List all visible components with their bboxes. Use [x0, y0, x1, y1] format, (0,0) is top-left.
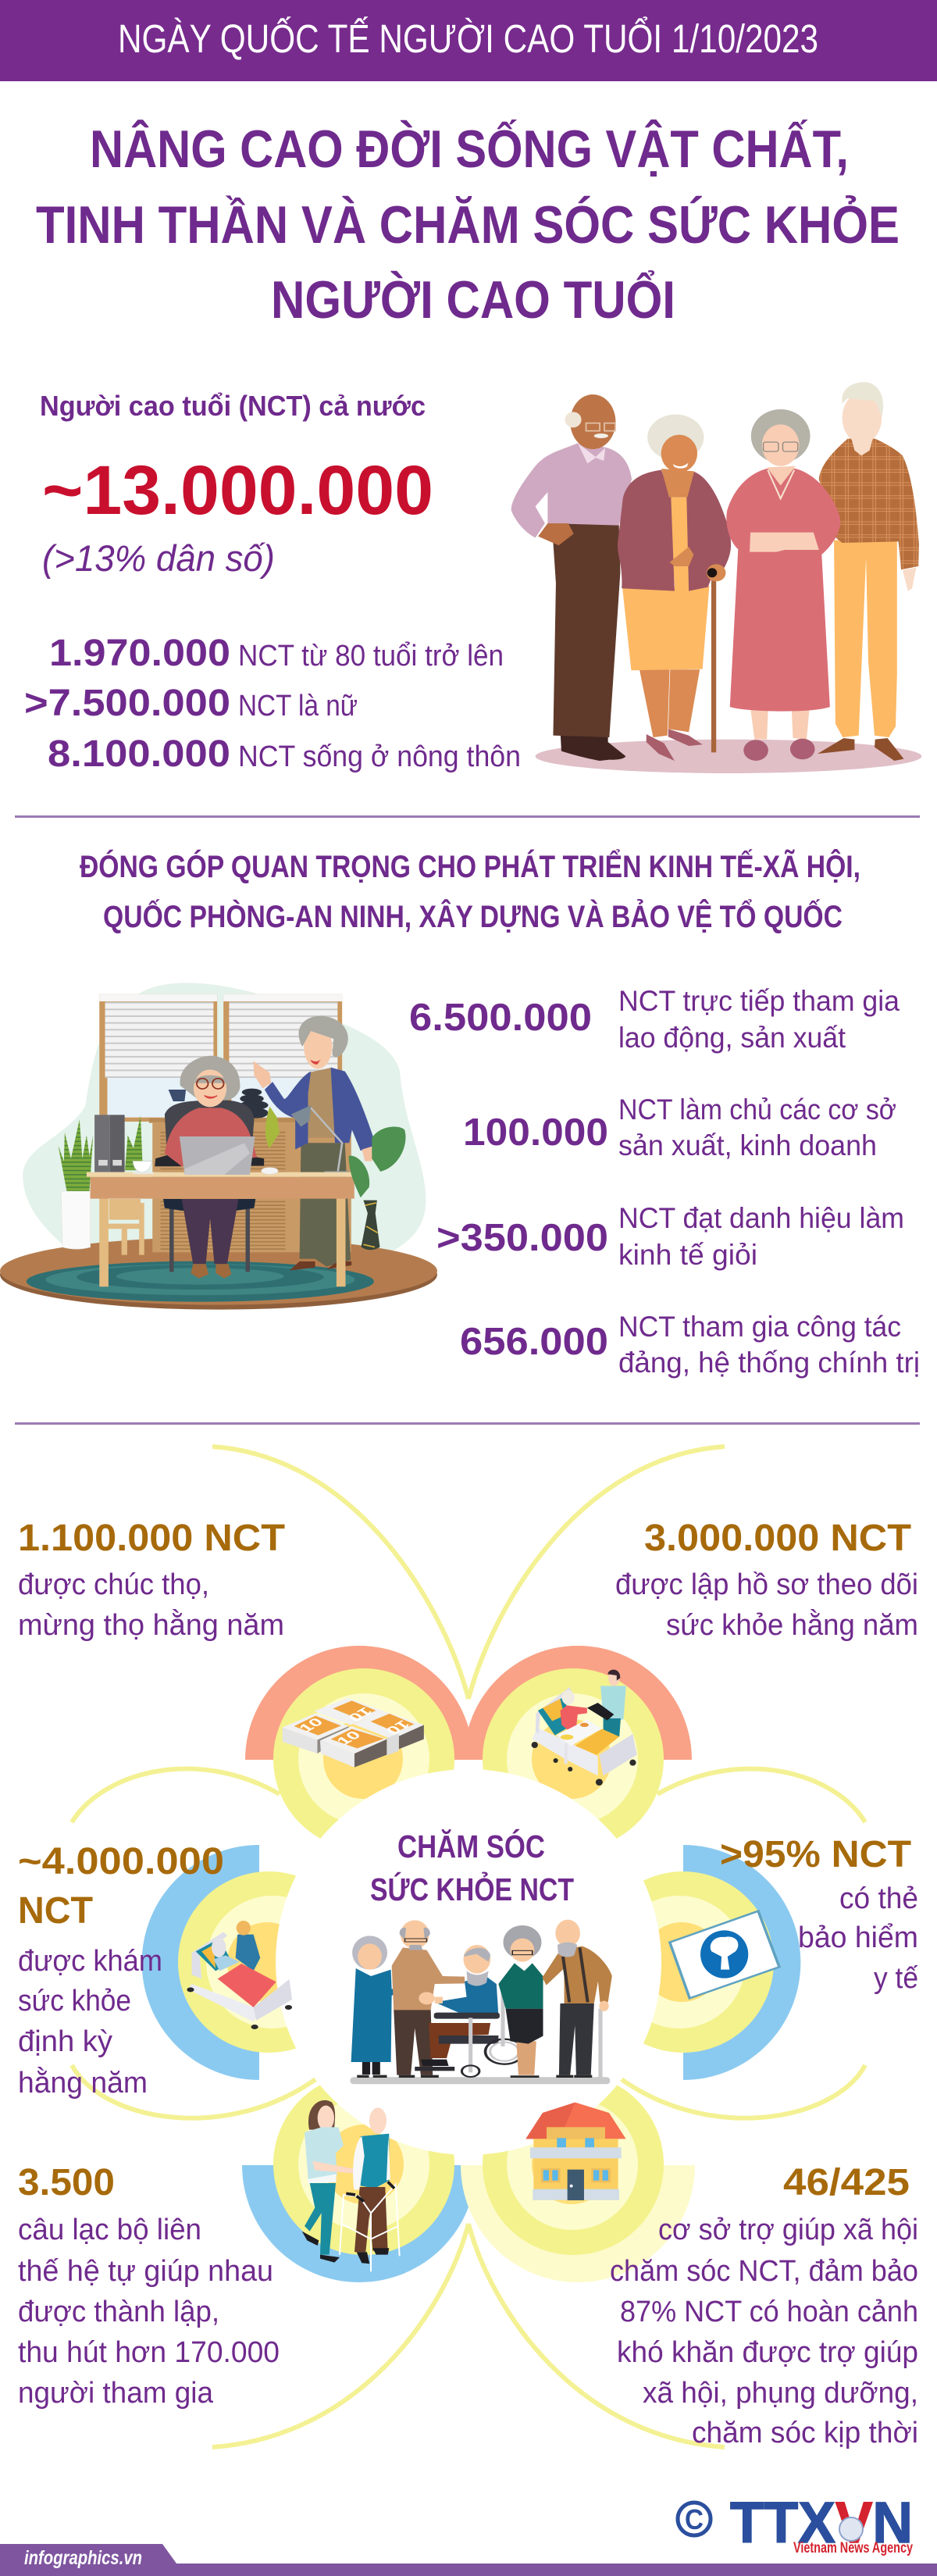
logo: TTXVN: TTXVN	[730, 2490, 913, 2555]
callout: periodic checkups: được khám	[18, 1945, 162, 1978]
central white circle	[276, 1769, 661, 2155]
callout: periodic checkups: ~4.000.000	[18, 1841, 224, 1882]
bottom half discs	[242, 2165, 476, 2282]
binders	[94, 1115, 125, 1172]
row: party work: đảng, hệ thống chính trị	[618, 1347, 920, 1379]
panel: contribution numbers	[409, 985, 920, 1379]
seated woman with chair	[155, 1056, 264, 1279]
row: labour: 6.500.000	[409, 997, 592, 1039]
callout: longevity celebration: mừng thọ hằng năm	[18, 1608, 284, 1642]
woman in blue	[351, 1936, 409, 2078]
callout: social assistance: 87% NCT có hoàn cảnh	[620, 2296, 918, 2328]
stat row: female: NCT là nữ	[238, 690, 358, 722]
row: party work: 656.000	[460, 1321, 608, 1363]
illustration: elderly office	[0, 983, 437, 1310]
callout: social assistance: chăm sóc kịp thời	[692, 2417, 918, 2449]
stool	[108, 1199, 144, 1255]
woman in cardigan with cane	[618, 415, 731, 761]
callout: intergenerational clubs: câu lạc bộ liên	[18, 2214, 201, 2246]
icon: money bundles: 10	[382, 1718, 414, 1737]
row: business owners: 100.000	[463, 1111, 608, 1154]
chart: healthcare petal diagram	[72, 1447, 865, 2447]
central heading: CHĂM SÓC	[397, 1829, 545, 1864]
desk	[87, 1172, 358, 1286]
section heading: contributions	[80, 847, 860, 934]
callout: social assistance: khó khăn được trợ giúp	[617, 2336, 918, 2369]
row: good economists	[436, 1202, 904, 1271]
row: party work: NCT tham gia công tác	[618, 1311, 901, 1343]
callout: periodic checkups: hằng năm	[18, 2066, 148, 2100]
woman in pink dress	[726, 409, 840, 761]
icon: money bundles: 10	[344, 1705, 376, 1724]
callout: intergenerational clubs: thu hút hơn 170.000	[18, 2336, 280, 2369]
tall man	[392, 1920, 465, 2078]
man in wheelchair	[415, 1945, 524, 2077]
population share: (>13% dân số)	[42, 537, 275, 579]
woman in green	[498, 1925, 543, 2078]
callout: health insurance: bảo hiểm	[798, 1921, 918, 1954]
divider	[15, 815, 920, 818]
stat row: rural	[48, 733, 521, 775]
title: NGƯỜI CAO TUỔI	[271, 269, 675, 330]
callout: social assistance: cơ sở trợ giúp xã hội	[658, 2214, 918, 2246]
callout: longevity celebration	[18, 1518, 285, 1642]
desk lamp	[291, 1105, 349, 1174]
stat row: over 80	[49, 633, 504, 674]
laptop	[180, 1136, 255, 1175]
stat row: over 80: 1.970.000	[49, 633, 230, 674]
row: good economists: >350.000	[436, 1217, 608, 1259]
callout: social assistance: chăm sóc NCT, đảm bảo	[610, 2255, 918, 2288]
man with suspenders and cane	[542, 1920, 612, 2078]
big number: ~13.000.000	[42, 451, 433, 529]
man in lilac shirt	[511, 394, 632, 761]
icon: money bundles	[283, 1698, 424, 1768]
row: good economists: kinh tế giỏi	[618, 1239, 757, 1271]
icon: nurse helping man with walker	[302, 2100, 400, 2271]
window right	[223, 994, 342, 1122]
connector curves	[72, 1447, 865, 2447]
callout: health records: sức khỏe hằng năm	[666, 1608, 918, 1642]
callout: longevity celebration: 1.100.000 NCT	[18, 1518, 285, 1559]
side half discs	[142, 1845, 259, 2080]
callout: social assistance	[610, 2162, 918, 2449]
callout: intergenerational clubs: người tham gia	[18, 2377, 214, 2410]
row: good economists: NCT đạt danh hiệu làm	[618, 1202, 904, 1234]
stat row: female	[24, 683, 358, 724]
stat row: over 80: NCT từ 80 tuổi trở lên	[238, 640, 504, 673]
panel: national statistics	[24, 390, 521, 775]
illustration: elderly group with wheelchair	[351, 1920, 612, 2084]
callout: longevity celebration: được chúc thọ,	[18, 1568, 209, 1601]
top half discs	[245, 1646, 473, 1760]
illustration: four elderly people	[511, 382, 921, 773]
callout: health insurance: y tế	[874, 1962, 918, 1995]
stat row: female: >7.500.000	[24, 683, 230, 724]
monstera and vase	[349, 1126, 406, 1250]
callout: intergenerational clubs: thế hệ tự giúp nhau	[18, 2255, 273, 2288]
callout: periodic checkups: định kỳ	[18, 2025, 112, 2058]
icon: caregiver serving patient in bed	[532, 1670, 637, 1786]
icon: nurse at bedside	[187, 1921, 292, 2029]
left pot and snake plant	[59, 1115, 143, 1249]
stat row: rural: NCT sống ở nông thôn	[238, 740, 521, 773]
cup and mouse	[132, 1161, 278, 1174]
callout: health insurance	[720, 1834, 918, 1995]
central heading: SỨC KHỎE NCT	[370, 1871, 574, 1907]
hanging plant	[265, 1107, 280, 1148]
callout: social assistance: xã hội, phụng dưỡng,	[643, 2377, 918, 2410]
row: party work	[460, 1311, 920, 1379]
divider	[15, 1422, 920, 1425]
icon: health insurance card	[670, 1911, 779, 1998]
callout: social assistance: 46/425	[783, 2162, 910, 2203]
stones and bowl	[169, 1089, 269, 1119]
row: labour	[409, 985, 900, 1054]
row: business owners	[463, 1094, 896, 1161]
icon: money bundles: 10	[295, 1715, 327, 1735]
title: NÂNG CAO ĐỜI SỐNG VẬT CHẤT,	[90, 119, 849, 179]
window left	[99, 994, 217, 1122]
row: business owners: sản xuất, kinh doanh	[618, 1129, 877, 1161]
footer bar	[0, 2544, 937, 2576]
floor	[0, 1240, 437, 1310]
man in plaid sweater	[818, 382, 919, 761]
cabinet	[149, 1119, 352, 1252]
title	[36, 119, 900, 330]
row: labour: NCT trực tiếp tham gia	[618, 985, 900, 1017]
callout: intergenerational clubs: được thành lập,	[18, 2296, 219, 2328]
icon: money bundles: 10	[333, 1729, 365, 1747]
callout: periodic checkups	[18, 1841, 224, 2100]
row: labour: lao động, sản xuất	[618, 1022, 846, 1054]
callout: health records	[615, 1518, 918, 1642]
callout: health records: 3.000.000 NCT	[644, 1518, 911, 1559]
logo: TTXVN: C	[685, 2503, 704, 2535]
callout: intergenerational clubs: 3.500	[18, 2162, 115, 2203]
standing man	[253, 1016, 376, 1271]
callout: intergenerational clubs	[18, 2162, 280, 2410]
footer bar: infographics.vn	[24, 2547, 142, 2569]
row: business owners: NCT làm chủ các cơ sở	[618, 1094, 896, 1126]
concentric circles	[178, 1668, 774, 2255]
callout: health insurance: có thẻ	[839, 1882, 918, 1915]
icon: care home house	[526, 2103, 626, 2200]
stat row: rural: 8.100.000	[48, 733, 230, 775]
header banner	[0, 0, 937, 81]
callout: health records: được lập hồ sơ theo dõi	[615, 1568, 918, 1601]
callout: periodic checkups: sức khỏe	[18, 1985, 131, 2018]
central heading	[370, 1829, 574, 1907]
label: elderly nationwide: Người cao tuổi (NCT) cả nước	[40, 390, 426, 422]
callout: health insurance: >95% NCT	[720, 1834, 911, 1875]
callout: periodic checkups: NCT	[18, 1890, 93, 1932]
rug	[27, 1261, 374, 1302]
